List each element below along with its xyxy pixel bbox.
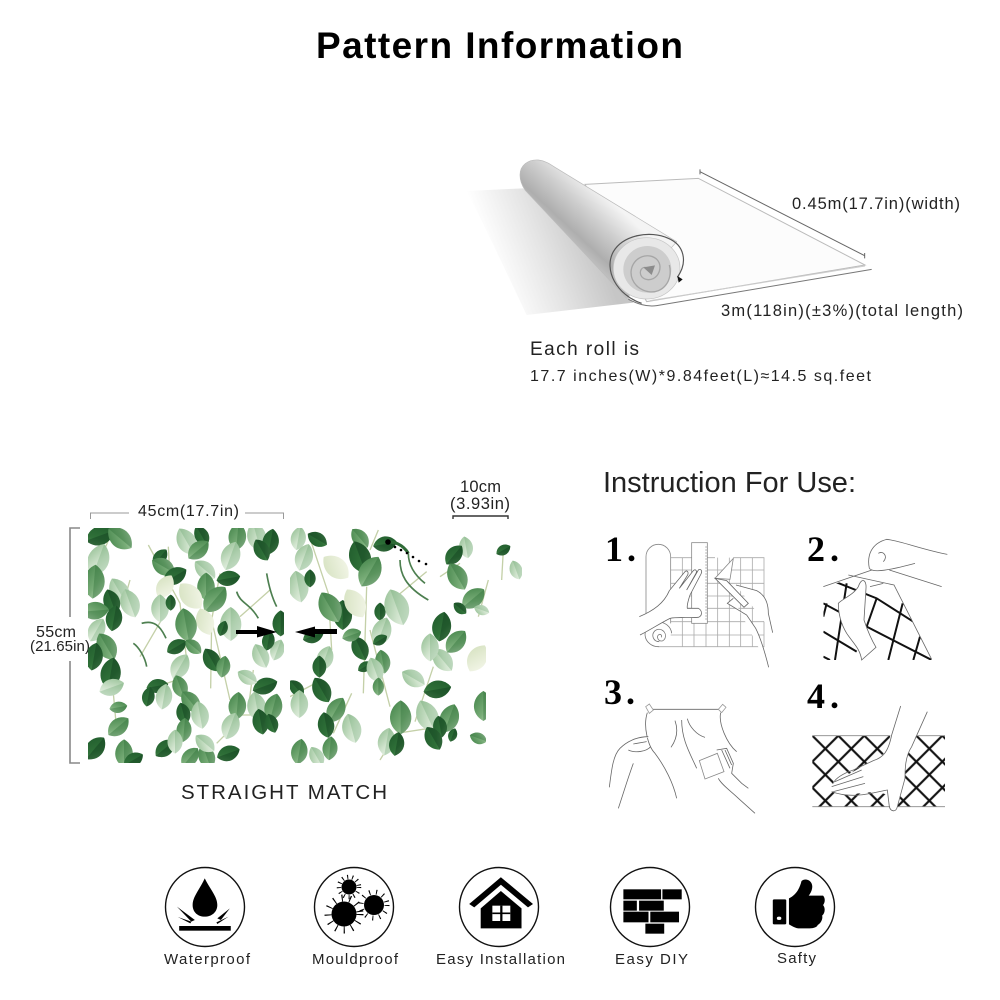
step 4 illustration [812, 706, 945, 811]
step 2 illustration [823, 539, 947, 660]
dimension: 10cm repeat: 10cm [460, 478, 501, 496]
icon: easy DIY [610, 868, 690, 946]
icon: waterproof [166, 868, 244, 946]
dimension: 55cm height: (21.65in) [30, 638, 90, 655]
dimension: 10cm repeat [450, 478, 510, 519]
wallpaper sample: right strip [285, 524, 525, 770]
wallpaper sample: left strip [79, 520, 289, 772]
step 4 number: 4 . [807, 676, 839, 716]
label: safety: Safty [777, 950, 816, 967]
icon: mouldproof [314, 868, 394, 946]
step 1 illustration [639, 543, 773, 667]
step 1 number: 1 . [605, 529, 636, 569]
label: waterproof: Waterproof [164, 951, 251, 968]
arrow: pointing right [236, 626, 277, 638]
panel: feature icons [164, 868, 834, 968]
caption: STRAIGHT MATCH [181, 781, 387, 804]
label: easy installation: Easy Installation [436, 951, 565, 968]
arrow: pointing left [295, 626, 337, 638]
label: width: 0.45m(17.7in)(width) [792, 195, 960, 213]
step 3 illustration [609, 704, 755, 813]
panel: roll diagram [467, 160, 963, 385]
label: easy DIY: Easy DIY [615, 951, 688, 968]
panel: instruction steps [604, 529, 947, 813]
label: total length: 3m(118in)(±3%)(total length) [721, 302, 963, 320]
icon: safety thumbs up [756, 868, 834, 946]
panel: straight match pattern [30, 478, 525, 804]
dimension: 55cm height: 55cm [36, 624, 76, 641]
step 2 number: 2 . [807, 529, 839, 569]
icon: easy installation [460, 868, 538, 946]
text: roll dimensions: 17.7 inches(W)*9.84feet(L)≈14.5 sq.feet [530, 368, 872, 385]
heading: instructions: Instruction For Use: [603, 467, 856, 499]
dimension: 45cm width: 45cm(17.7in) [138, 503, 239, 520]
text: each roll is: Each roll is [530, 339, 639, 360]
dimension: 45cm width [90, 503, 284, 520]
dotted match guide [385, 539, 427, 565]
dimension: 10cm repeat: (3.93in) [450, 495, 510, 513]
step 3 number: 3 . [604, 672, 635, 712]
illustration: wallpaper roll [467, 160, 872, 315]
label: mouldproof: Mouldproof [312, 951, 399, 968]
title: Pattern Information [316, 25, 683, 66]
dimension: 55cm height [30, 528, 90, 763]
